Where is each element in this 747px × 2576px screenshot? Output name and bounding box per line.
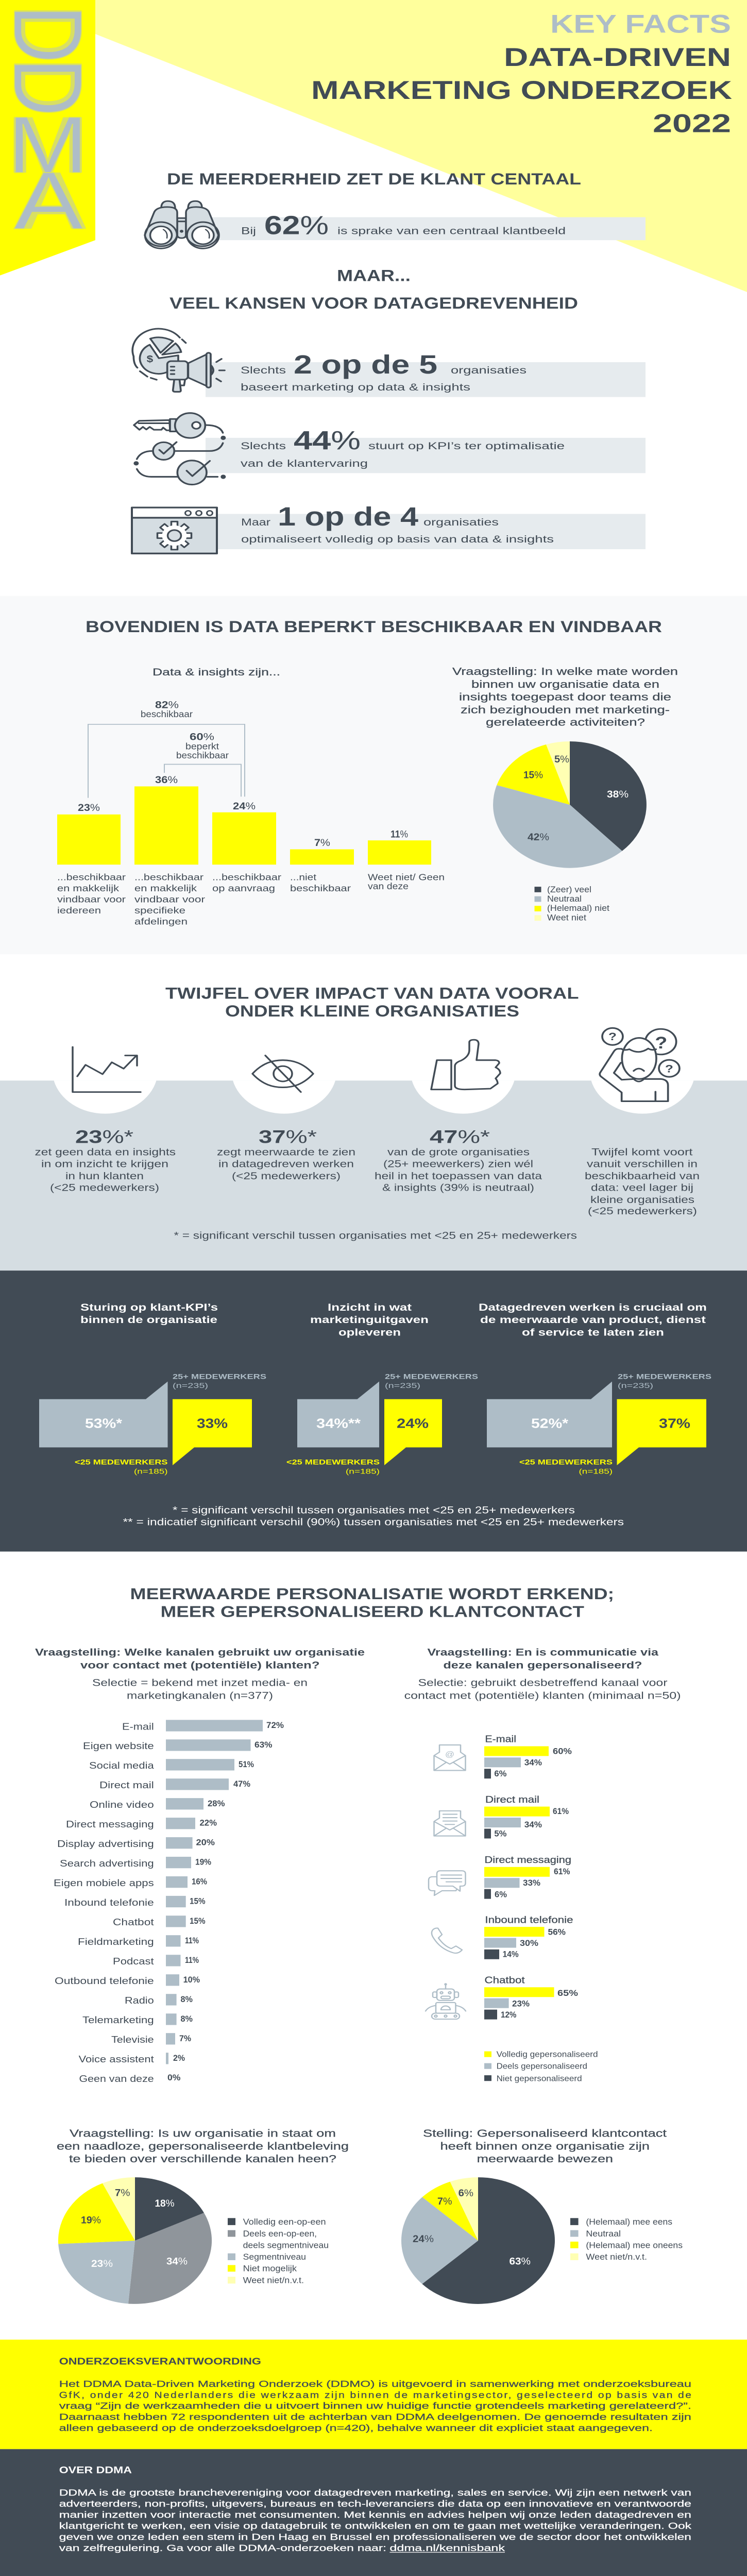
- chart group: inbound telefonie: [484, 1915, 573, 1959]
- stat: 47 procent: [375, 1127, 542, 1193]
- panel: over DDMA: klantgericht te werken, een visie op datagebruik te ontwikkelen en om te gaan met wettelijke veranderingen. Ook: [59, 2521, 691, 2531]
- bar chart: beschikbaarheid: en makkelijk: [57, 884, 119, 894]
- panel: over DDMA: DDMA is de grootste branchevereniging voor datagedreven marketing, sales en service. Wij zijn een netwerk van: [59, 2488, 691, 2498]
- bar chart: beschikbaarheid: ...beschikbaar: [57, 873, 126, 883]
- chart: marketinguitgaven: <25 MEDEWERKERS: [286, 1459, 380, 1466]
- bar chart: kanalen: Eigen website: [83, 1741, 154, 1752]
- legend: personalisatie: Volledig gepersonaliseerd: [497, 2049, 598, 2059]
- footnotes: significantie: ** = indicatief significant verschil (90%) tussen organisaties met <25 en 25+ medewerkers: [123, 1517, 624, 1528]
- banner: DDMA logo: [0, 0, 103, 276]
- bar chart: beschikbaarheid: vindbaar voor: [57, 895, 126, 905]
- chart group: e-mail: [484, 1734, 572, 1778]
- bar chart: kanalen: 10%: [183, 1975, 200, 1984]
- icon: thumbs up: [431, 1040, 500, 1090]
- chart group: e-mail: 34%: [524, 1757, 542, 1767]
- panel: 44 procent: Slechts: [241, 440, 286, 452]
- pie chart: naadloze klantbeleving: [58, 2177, 212, 2304]
- pie chart: toepassing data: 15%: [523, 770, 543, 781]
- bar chart: kanalen: Social media: [89, 1761, 155, 1771]
- pie chart: toepassing data: 5%: [554, 754, 569, 765]
- panel: onderzoeksverantwoording: Daarnaast hebben 72 respondenten uit de achterban van DDMA deelgenomen. De genoemde resultaten zijn: [59, 2413, 691, 2422]
- stat: 37 procent: zegt meerwaarde te zien: [217, 1147, 355, 1158]
- pie chart: meerwaarde bewezen: 63%: [509, 2256, 531, 2267]
- chart: marketinguitgaven: 34%**: [316, 1416, 361, 1431]
- icon: e-mail envelope: [434, 1745, 466, 1770]
- panel: 62 procent klantbeeld: 62%: [264, 211, 329, 240]
- question: welke kanalen: [35, 1646, 365, 1701]
- question: welke mate: [452, 665, 678, 728]
- text: twijfel verschillen: data: veel lager bij: [591, 1182, 693, 1193]
- bar chart: kanalen: 11%: [185, 1936, 199, 1945]
- question: welke kanalen: marketingkanalen (n=377): [127, 1689, 273, 1701]
- stat: 47 procent: (25+ meewerkers) zien wél: [383, 1159, 533, 1170]
- title: KEY FACTS: [550, 9, 731, 38]
- heading: meerwaarde personalisatie: [130, 1585, 614, 1621]
- banner: DDMA logo: M: [7, 100, 88, 190]
- title: DATA-DRIVEN: [504, 42, 731, 72]
- question: gepersonaliseerd: contact met (potentiële) klanten (minimaal n=50): [404, 1689, 681, 1701]
- statement: meerwaarde bewezen: [423, 2127, 667, 2165]
- text: twijfel verschillen: Twijfel komt voort: [591, 1147, 693, 1158]
- legend: pie toepassing: Weet niet: [547, 912, 586, 922]
- bar chart: beschikbaarheid: vindbaar voor: [134, 895, 206, 905]
- panel: onderzoeksverantwoording: alleen gebaseerd op de onderzoeksdoelgroep (n=420), behalve wanneer dit expliciet staat aangegeven.: [59, 2424, 653, 2433]
- panel: 62 procent klantbeeld: [210, 211, 646, 240]
- panel: onderzoeksverantwoording: vraag “Zijn de werkzaamheden die u uitvoert binnen uw huidige functie grotendeels marketing gerelateerd?”.: [59, 2401, 691, 2411]
- chart group: direct messaging: 33%: [523, 1878, 540, 1888]
- legend: naadloze klantbeleving: Niet mogelijk: [243, 2263, 297, 2273]
- bracket: 82 procent: 82%: [155, 700, 179, 710]
- bar chart: beschikbaarheid: van deze: [368, 882, 409, 892]
- panel: over DDMA: ddma.nl/kennisbank: [389, 2544, 505, 2553]
- chart group: inbound telefonie: 30%: [520, 1938, 538, 1948]
- panel: 1 op de 4: optimaliseert volledig op basis van data & insights: [241, 533, 554, 545]
- pie chart: naadloze klantbeleving: 7%: [115, 2188, 130, 2198]
- question: gepersonaliseerd: deze kanalen gepersonaliseerd?: [443, 1659, 642, 1671]
- chart: sturing op klant-KPI's: binnen de organisatie: [80, 1314, 217, 1326]
- legend: meerwaarde bewezen: (Helemaal) mee oneens: [586, 2240, 683, 2250]
- chart group: direct messaging: 6%: [495, 1889, 507, 1899]
- stat: 23 procent: in om inzicht te krijgen: [41, 1159, 168, 1170]
- bar chart: kanalen: 15%: [190, 1916, 206, 1926]
- question: naadloze klantbeleving: een naadloze, gepersonaliseerde klantbeleving: [57, 2140, 349, 2152]
- chart group: direct mail: 61%: [553, 1806, 569, 1816]
- chart group: e-mail: 6%: [494, 1769, 506, 1778]
- chart: marketinguitgaven: [286, 1301, 478, 1476]
- bar chart: kanalen: Voice assistent: [79, 2055, 154, 2065]
- panel: 2 op de 5: Slechts: [241, 364, 286, 376]
- pie chart: meerwaarde bewezen: 6%: [459, 2188, 473, 2198]
- icon: crossed eye: [252, 1056, 313, 1092]
- chart group: chatbot: Chatbot: [484, 1975, 525, 1986]
- bar chart: kanalen: 2%: [173, 2053, 185, 2063]
- chart: datagedreven werken: [479, 1301, 711, 1476]
- chart: datagedreven werken: 52%*: [531, 1416, 569, 1431]
- chart: sturing op klant-KPI's: 33%: [197, 1416, 228, 1431]
- panel: 2 op de 5: 2 op de 5: [294, 350, 437, 380]
- chart group: chatbot: [484, 1975, 578, 2020]
- legend: meerwaarde bewezen: (Helemaal) mee eens: [586, 2217, 672, 2227]
- heading: twijfel over impact: [165, 985, 579, 1020]
- panel: over DDMA: van zelfregulering. Ga voor alle DDMA-onderzoeken naar:: [59, 2544, 386, 2553]
- stat: 37 procent: [217, 1127, 355, 1181]
- icon: megaphone with pie: [132, 329, 225, 392]
- bar chart: kanalen: 22%: [199, 1818, 217, 1827]
- stat: 47 procent: & insights (39% is neutraal): [382, 1182, 534, 1193]
- question: welke mate: zich bezighouden met marketing-: [461, 704, 670, 716]
- bar chart: kanalen: [54, 1720, 284, 2084]
- bracket: 82 procent: beschikbaar: [141, 710, 193, 719]
- pie chart: meerwaarde bewezen: [401, 2177, 555, 2304]
- icon: e-mail envelope: @: [445, 1750, 454, 1759]
- panel: 1 op de 4: [206, 502, 646, 549]
- question: welke mate: Vraagstelling: In welke mate worden: [452, 665, 678, 677]
- chart group: direct mail: [484, 1794, 569, 1838]
- bar chart: kanalen: 15%: [190, 1896, 206, 1906]
- panel: 44 procent: stuurt op KPI’s ter optimalisatie: [368, 440, 565, 452]
- legend: pie toepassing: Neutraal: [547, 894, 582, 904]
- bar chart: kanalen: Geen van deze: [79, 2074, 154, 2084]
- panel: onderzoeksverantwoording: GfK, onder 420 Nederlanders die werkzaam zijn binnen de marketingsector, geselecteerd op basis van de: [59, 2391, 691, 2400]
- icon: telephone: [432, 1928, 462, 1953]
- icon: doubting person: [600, 1028, 680, 1101]
- pie chart: naadloze klantbeleving: 23%: [91, 2259, 113, 2269]
- question: gepersonaliseerd: Selectie: gebruikt desbetreffend kanaal voor: [418, 1676, 667, 1688]
- bar chart: kanalen: Direct mail: [99, 1781, 154, 1791]
- bar chart: kanalen: 72%: [266, 1720, 284, 1730]
- icon: direct mail envelope: [434, 1811, 466, 1836]
- chart: sturing op klant-KPI's: 25+ MEDEWERKERS: [173, 1373, 266, 1381]
- bar chart: kanalen: Search advertising: [60, 1859, 154, 1869]
- pie chart: naadloze klantbeleving: 34%: [166, 2256, 188, 2267]
- bar chart: beschikbaarheid: beschikbaar: [290, 884, 351, 894]
- icon: browser window with gear: [132, 507, 217, 553]
- chart group: direct messaging: Direct messaging: [484, 1855, 571, 1865]
- chart: sturing op klant-KPI's: (n=185): [134, 1468, 168, 1476]
- stat: 37 procent: 37%*: [259, 1127, 317, 1147]
- pie chart: meerwaarde bewezen: 24%: [413, 2234, 434, 2244]
- footnote: significant: * = significant verschil tussen organisaties met <25 en 25+ medewerkers: [174, 1230, 577, 1241]
- panel: over DDMA: OVER DDMA: [59, 2465, 132, 2476]
- legend: meerwaarde bewezen: [570, 2217, 683, 2262]
- title: [311, 9, 732, 138]
- header background triangle: [95, 0, 747, 292]
- question: naadloze klantbeleving: [57, 2127, 349, 2165]
- panel: 62 procent klantbeeld: Bij: [241, 225, 256, 236]
- bar chart: beschikbaarheid: specifieke: [134, 906, 185, 916]
- bar chart: beschikbaarheid: 23%: [78, 803, 100, 814]
- question: gepersonaliseerd: [404, 1646, 681, 1701]
- bar chart: kanalen: 8%: [180, 2014, 193, 2024]
- bar chart: kanalen: Eigen mobiele apps: [54, 1878, 154, 1888]
- stat: 23 procent: zet geen data en insights: [35, 1147, 176, 1158]
- chart group: chatbot: 12%: [501, 2010, 516, 2019]
- chart group: e-mail: E-mail: [485, 1734, 516, 1744]
- bar chart: kanalen: 51%: [239, 1759, 254, 1769]
- chart: marketinguitgaven: 25+ MEDEWERKERS: [385, 1373, 478, 1381]
- chart group: inbound telefonie: 56%: [548, 1927, 566, 1937]
- icon: doubting person: ?: [608, 1030, 617, 1043]
- bar chart: kanalen: 7%: [179, 2033, 191, 2043]
- chart: datagedreven werken: (n=185): [579, 1468, 613, 1476]
- panel: 2 op de 5: organisaties: [451, 364, 527, 376]
- bracket: 82 procent: [88, 700, 245, 798]
- question: naadloze klantbeleving: Vraagstelling: Is uw organisatie in staat om: [70, 2127, 336, 2139]
- chart: datagedreven werken: de meerwaarde van product, dienst: [480, 1314, 706, 1326]
- footnotes: significantie: [123, 1505, 624, 1528]
- question: naadloze klantbeleving: te bieden over verschillende kanalen heen?: [69, 2153, 336, 2165]
- question: welke kanalen: Selectie = bekend met inzet media- en: [92, 1676, 308, 1688]
- text: twijfel verschillen: vanuit verschillen in: [587, 1159, 698, 1170]
- bar chart: kanalen: 63%: [254, 1740, 272, 1750]
- chart: sturing op klant-KPI's: Sturing op klant-KPI’s: [80, 1301, 218, 1313]
- heading: twijfel over impact: ONDER KLEINE ORGANISATIES: [225, 1002, 519, 1020]
- bar chart: beschikbaarheid: ...niet: [290, 873, 317, 883]
- bar chart: kanalen: Fieldmarketing: [78, 1937, 154, 1947]
- panel: 62 procent klantbeeld: is sprake van een centraal klantbeeld: [337, 225, 566, 236]
- title: 2022: [653, 109, 731, 138]
- panel: 2 op de 5: baseert marketing op data & insights: [241, 381, 470, 393]
- question: welke mate: binnen uw organisatie data en: [471, 678, 659, 690]
- panel: 1 op de 4: 1 op de 4: [278, 502, 418, 532]
- chart: marketinguitgaven: marketinguitgaven: [310, 1314, 429, 1326]
- panel: 44 procent: 44%: [294, 426, 361, 455]
- legend: pie toepassing: (Helemaal) niet: [547, 903, 609, 913]
- bar chart: kanalen: 28%: [208, 1798, 225, 1808]
- panel: onderzoeksverantwoording: [0, 2340, 747, 2449]
- bar chart: kanalen: Radio: [125, 1996, 154, 2006]
- chart group: direct messaging: [484, 1855, 571, 1899]
- bar chart: beschikbaarheid: ...beschikbaar: [134, 873, 204, 883]
- chart group: inbound telefonie: Inbound telefonie: [485, 1915, 573, 1925]
- stat: 23 procent: [35, 1127, 176, 1193]
- panel: twijfel statistieken: [0, 1080, 747, 1270]
- bar chart: kanalen: Direct messaging: [66, 1820, 154, 1830]
- chart: marketinguitgaven: opleveren: [338, 1326, 401, 1338]
- panel: onderzoeksverantwoording: ONDERZOEKSVERANTWOORDING: [59, 2357, 261, 2367]
- chart: sturing op klant-KPI's: 53%*: [85, 1416, 123, 1431]
- heading: maar: MAAR...: [337, 266, 411, 285]
- chart: datagedreven werken: Datagedreven werken is cruciaal om: [479, 1301, 707, 1313]
- chart: datagedreven werken: of service te laten zien: [522, 1326, 664, 1338]
- chart group: direct mail: 5%: [494, 1828, 506, 1838]
- legend: personalisatie: Niet gepersonaliseerd: [497, 2074, 582, 2083]
- question: welke mate: insights toegepast door teams die: [459, 691, 671, 703]
- legend: personalisatie: Deels gepersonaliseerd: [497, 2061, 587, 2071]
- chart group: direct messaging: 61%: [554, 1867, 570, 1876]
- bar chart: beschikbaarheid: iedereen: [57, 906, 101, 916]
- bar chart: kanalen: Podcast: [113, 1957, 154, 1967]
- legend: naadloze klantbeleving: Weet niet/n.v.t.: [243, 2275, 304, 2285]
- legend: naadloze klantbeleving: Deels een-op-een,: [243, 2228, 317, 2238]
- icon: binoculars: [145, 201, 219, 248]
- pie chart: naadloze klantbeleving: 19%: [81, 2215, 101, 2226]
- statement: meerwaarde bewezen: Stelling: Gepersonaliseerd klantcontact: [423, 2127, 667, 2139]
- chart: marketinguitgaven: 24%: [397, 1416, 429, 1431]
- pie chart: meerwaarde bewezen: 7%: [437, 2196, 452, 2207]
- bar chart: beschikbaarheid: afdelingen: [134, 917, 188, 927]
- bar chart: beschikbaarheid: 11%: [391, 829, 408, 840]
- chart: sturing op klant-KPI's: <25 MEDEWERKERS: [75, 1459, 167, 1466]
- panel: beschikbaar en vindbaar: [0, 596, 747, 954]
- chart: datagedreven werken: <25 MEDEWERKERS: [519, 1459, 613, 1466]
- bar chart: kanalen: Outbound telefonie: [55, 1976, 154, 1987]
- panel: 44 procent: [206, 426, 646, 473]
- bar chart: beschikbaarheid: Weet niet/ Geen: [368, 873, 445, 883]
- stat: 23 procent: (<25 medewerkers): [50, 1182, 159, 1193]
- panel: 2 op de 5: [206, 350, 646, 397]
- heading: meerwaarde personalisatie: MEER GEPERSONALISEERD KLANTCONTACT: [161, 1603, 584, 1621]
- text: twijfel verschillen: beschikbaarheid van: [585, 1171, 700, 1181]
- chart group: inbound telefonie: 14%: [503, 1949, 519, 1959]
- bar chart: kanalen: 11%: [185, 1955, 199, 1965]
- stat: 37 procent: in datagedreven werken: [218, 1159, 354, 1170]
- panel: 44 procent: van de klantervaring: [241, 457, 368, 469]
- bar chart: kanalen: Chatbot: [113, 1918, 154, 1928]
- heading: de meerderheid: DE MEERDERHEID ZET DE KLANT CENTAAL: [167, 170, 581, 188]
- bar chart: beschikbaarheid: op aanvraag: [212, 884, 275, 894]
- chart: sturing op klant-KPI's: [39, 1301, 266, 1476]
- bar chart: kanalen: Televisie: [111, 2035, 154, 2045]
- icon: doubting person: ?: [655, 1033, 667, 1052]
- bar chart: kanalen: Display advertising: [57, 1839, 154, 1849]
- icon: megaphone with pie: $: [147, 354, 154, 365]
- chart group: direct mail: Direct mail: [485, 1794, 539, 1805]
- chart group: chatbot: 65%: [557, 1988, 578, 1997]
- legend: meerwaarde bewezen: Weet niet/n.v.t.: [586, 2252, 647, 2262]
- bar chart: kanalen: 47%: [233, 1779, 250, 1788]
- bar chart: kanalen: 0%: [167, 2073, 180, 2082]
- bar chart: kanalen: E-mail: [122, 1722, 154, 1732]
- pie chart: toepassing data: [493, 741, 647, 868]
- legend: naadloze klantbeleving: Segmentniveau: [243, 2252, 306, 2262]
- panel: over DDMA: [0, 2449, 747, 2576]
- bar chart: beschikbaarheid: en makkelijk: [134, 884, 197, 894]
- text: twijfel verschillen: kleine organisaties: [590, 1195, 694, 1205]
- pie chart: toepassing data: 38%: [607, 789, 629, 800]
- stat: 23 procent: 23%*: [75, 1127, 133, 1147]
- statement: meerwaarde bewezen: heeft binnen onze organisatie zijn: [440, 2140, 650, 2152]
- panel: over DDMA: adverteerders, non-profits, uitgevers, bureaus en tech-leveranciers die data op een innovatieve en verantwoorde: [59, 2499, 691, 2509]
- legend: personalisatie: [484, 2049, 598, 2083]
- bar chart: kanalen: 20%: [196, 1837, 215, 1847]
- panel: onderzoeksverantwoording: Het DDMA Data-Driven Marketing Onderzoek (DDMO) is uitgevoerd in samenwerking met onderzoeksbureau: [59, 2379, 691, 2389]
- bracket: 60 procent: beschikbaar: [176, 751, 229, 760]
- bar chart: beschikbaarheid: 24%: [233, 801, 256, 811]
- pie chart: toepassing data: 42%: [528, 832, 549, 843]
- panel: over DDMA: geven we onze leden een stem in Den Haag en Brussel en professionaliseren we de sector door het ontwikkelen: [59, 2532, 691, 2542]
- icon: doubting person: ?: [665, 1062, 673, 1075]
- panel: klant-KPI vergelijking: [0, 1270, 747, 1552]
- panel: over DDMA: manier inzetten voor interactie met consumenten. Met kennis en advies helpen wij onze leden datagedreven en: [59, 2511, 691, 2520]
- footnotes: significantie: * = significant verschil tussen organisaties met <25 en 25+ medewerkers: [173, 1505, 575, 1516]
- title: MARKETING ONDERZOEK: [311, 75, 732, 105]
- bracket: 60 procent: [164, 732, 241, 796]
- text: twijfel verschillen: (<25 medewerkers): [588, 1206, 697, 1217]
- legend: naadloze klantbeleving: [228, 2217, 329, 2285]
- chart: datagedreven werken: 37%: [659, 1416, 690, 1431]
- panel: 1 op de 4: organisaties: [423, 516, 499, 528]
- chart group: e-mail: 60%: [553, 1746, 572, 1756]
- bar chart: kanalen: 8%: [180, 1994, 193, 2004]
- stat: 37 procent: (<25 medewerkers): [232, 1171, 341, 1181]
- legend: naadloze klantbeleving: deels segmentniveau: [243, 2240, 329, 2250]
- question: welke mate: gerelateerde activiteiten?: [486, 716, 645, 728]
- chart: datagedreven werken: 25+ MEDEWERKERS: [618, 1373, 711, 1381]
- heading: veel kansen: VEEL KANSEN VOOR DATAGEDREVENHEID: [169, 294, 578, 312]
- icon: chat bubbles: [429, 1871, 466, 1895]
- bar chart: kanalen: Online video: [90, 1800, 154, 1810]
- stat: 47 procent: van de grote organisaties: [387, 1147, 530, 1158]
- panel: 1 op de 4: Maar: [241, 516, 270, 528]
- icon: key and checks: [133, 413, 226, 485]
- text: twijfel verschillen: [585, 1147, 700, 1217]
- heading: meerwaarde personalisatie: MEERWAARDE PERSONALISATIE WORDT ERKEND;: [130, 1585, 614, 1603]
- bracket: 60 procent: beperkt: [185, 742, 219, 752]
- chart group: chatbot: 23%: [512, 1998, 530, 2008]
- bar chart: beschikbaarheid: 7%: [314, 838, 330, 848]
- icon: line chart: [73, 1047, 141, 1092]
- pie chart: naadloze klantbeleving: 18%: [155, 2198, 174, 2209]
- bracket: 60 procent: 60%: [190, 732, 214, 742]
- chart: sturing op klant-KPI's: (n=235): [173, 1382, 208, 1389]
- chart: marketinguitgaven: (n=235): [385, 1382, 420, 1389]
- chart: marketinguitgaven: Inzicht in wat: [328, 1301, 412, 1313]
- bar chart: beschikbaarheid: ...beschikbaar: [212, 873, 282, 883]
- legend: pie toepassing: [535, 885, 609, 922]
- icon: robot: [426, 1984, 466, 2019]
- banner: DDMA logo: A: [14, 155, 83, 246]
- bar chart: kanalen: Inbound telefonie: [64, 1898, 154, 1908]
- banner: DDMA logo: A: [14, 155, 89, 246]
- statement: meerwaarde bewezen: meerwaarde bewezen: [477, 2153, 613, 2165]
- stat: 47 procent: 47%*: [430, 1127, 490, 1147]
- bar chart: beschikbaarheid: [57, 775, 445, 927]
- chart: datagedreven werken: (n=235): [618, 1382, 653, 1389]
- banner: DDMA logo: M: [7, 100, 88, 190]
- bar chart: beschikbaarheid: 36%: [155, 775, 178, 785]
- heading: twijfel over impact: TWIJFEL OVER IMPACT VAN DATA VOORAL: [165, 985, 579, 1003]
- chart group: direct mail: 34%: [524, 1819, 542, 1829]
- subheading: data and insights: Data & insights zijn...: [152, 666, 280, 678]
- legend: naadloze klantbeleving: Volledig een-op-een: [243, 2217, 326, 2227]
- legend: meerwaarde bewezen: Neutraal: [586, 2228, 621, 2238]
- bar chart: kanalen: Telemarketing: [82, 2015, 154, 2026]
- stat: 47 procent: heil in het toepassen van data: [375, 1171, 542, 1181]
- legend: pie toepassing: (Zeer) veel: [547, 885, 591, 894]
- question: gepersonaliseerd: Vraagstelling: En is communicatie via: [428, 1646, 659, 1658]
- bar chart: kanalen: 16%: [192, 1876, 207, 1886]
- question: welke kanalen: voor contact met (potentiële) klanten?: [80, 1659, 319, 1671]
- heading: bovendien: BOVENDIEN IS DATA BEPERKT BESCHIKBAAR EN VINDBAAR: [86, 618, 662, 636]
- chart: marketinguitgaven: (n=185): [346, 1468, 380, 1476]
- stat: 23 procent: in hun klanten: [65, 1171, 144, 1181]
- question: welke kanalen: Vraagstelling: Welke kanalen gebruikt uw organisatie: [35, 1646, 365, 1658]
- bar chart: kanalen: 19%: [195, 1857, 211, 1867]
